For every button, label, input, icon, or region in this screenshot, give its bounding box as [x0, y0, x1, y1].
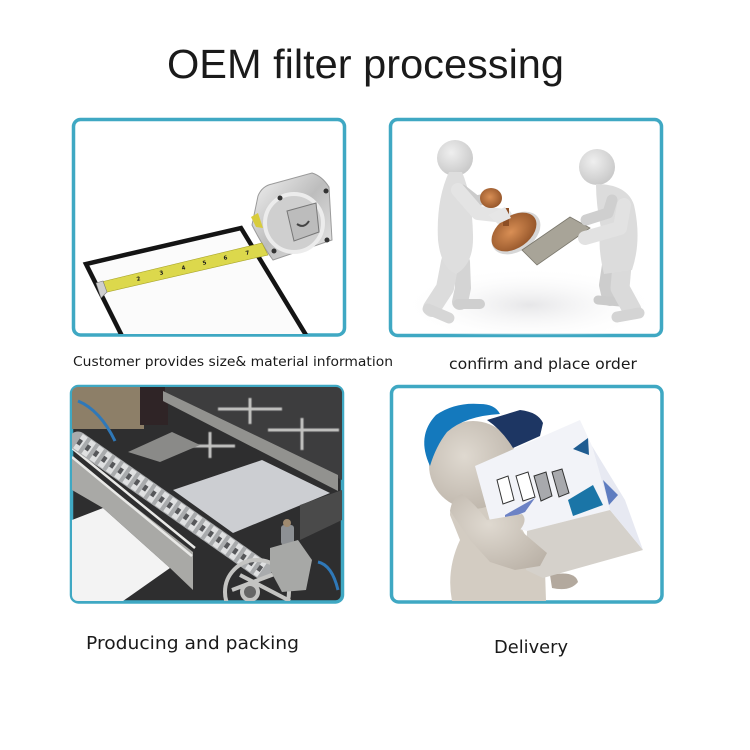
yellow measuring tape: 5	[202, 260, 207, 267]
yellow measuring tape: 7	[245, 250, 250, 257]
left figure	[428, 140, 505, 318]
panel: delivery	[392, 386, 662, 602]
clipboard	[522, 217, 590, 265]
yellow measuring tape: 3	[159, 270, 164, 277]
right figure	[579, 149, 639, 317]
title: OEM filter processing	[167, 41, 564, 87]
yellow measuring tape	[96, 243, 268, 298]
machine fan bolts	[183, 398, 339, 458]
yellow measuring tape: 6	[223, 255, 228, 262]
steel beam	[163, 391, 338, 491]
blue air hoses	[78, 401, 338, 590]
panel: production machinery	[72, 386, 342, 624]
handwheel	[223, 558, 291, 601]
caption: step 1: Customer provides size& material information	[73, 355, 393, 370]
panel: measuring size	[74, 120, 344, 340]
cap	[424, 404, 500, 466]
caption: step 2: confirm and place order	[449, 355, 638, 373]
hand on box	[450, 494, 547, 570]
product box	[475, 420, 643, 578]
caption: step 3: Producing and packing	[86, 633, 299, 654]
metal housing	[72, 458, 193, 590]
black filter frame	[86, 228, 309, 340]
pleating roller	[78, 441, 262, 570]
panel: confirm order	[390, 120, 662, 343]
delivery figure	[424, 404, 578, 601]
white material roll	[72, 508, 170, 601]
filter diagrams on box	[497, 469, 569, 504]
yellow measuring tape: 2	[136, 276, 141, 283]
yellow measuring tape: 4	[181, 265, 186, 272]
copper stamp	[480, 188, 540, 254]
filter paper sheet	[173, 460, 330, 533]
pneumatic valve	[270, 519, 312, 592]
caption: step 4: Delivery	[494, 638, 568, 658]
tape measure case	[251, 173, 332, 260]
